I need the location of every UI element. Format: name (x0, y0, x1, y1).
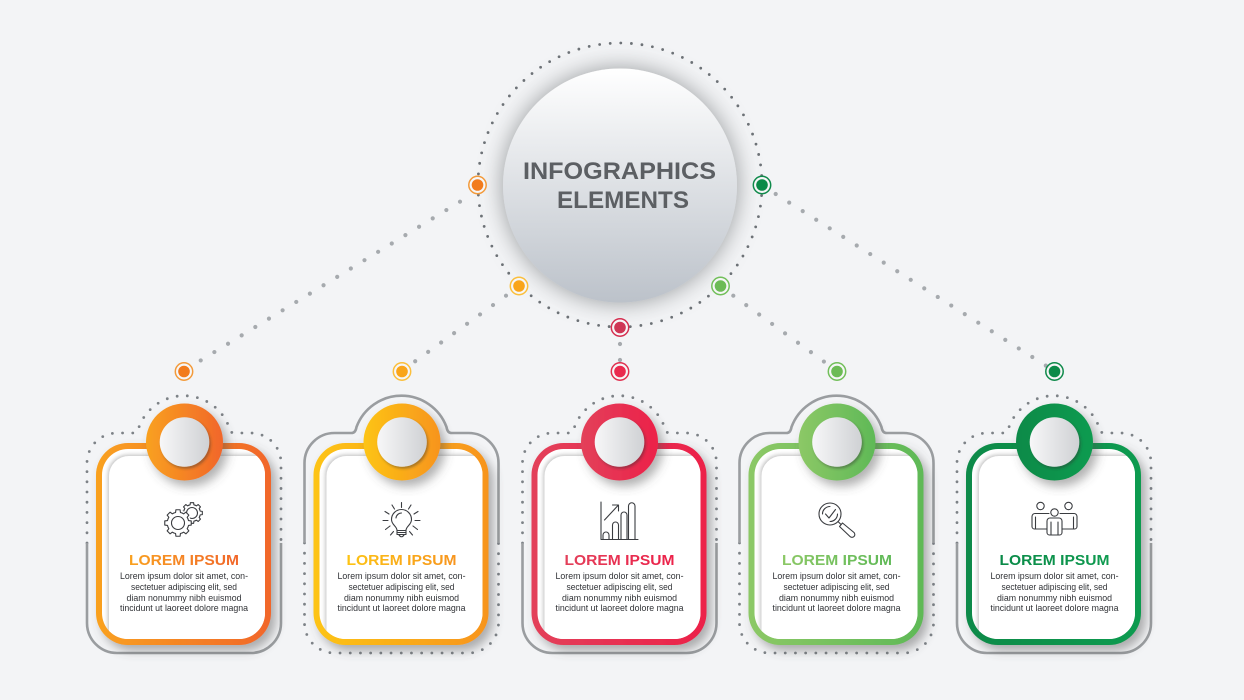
node: yellow upper (510, 277, 528, 295)
connector: red dotted line (618, 344, 622, 361)
node: light green lower (828, 363, 846, 380)
node: light green upper (712, 277, 729, 295)
panel: card 5 dark green (957, 396, 1151, 656)
dotted ring around main circle (478, 43, 762, 327)
body text: tincidunt ut laoreet dolore magna (120, 603, 249, 613)
body text: Lorem ipsum dolor sit amet, con- (338, 571, 466, 581)
node: dark green upper (753, 176, 771, 194)
title: ELEMENTS (557, 187, 689, 214)
heading: LOREM IPSUM (1000, 552, 1110, 569)
body text: sectetuer adipiscing elit, sed (566, 582, 672, 592)
title (523, 158, 716, 214)
title: INFOGRAPHICS (523, 158, 716, 185)
body text (772, 571, 901, 613)
panel: card 4 light green (740, 396, 934, 656)
icon: gears (165, 503, 202, 536)
panel: card 2 yellow (304, 396, 498, 656)
body text: Lorem ipsum dolor sit amet, con- (120, 571, 248, 581)
body text: sectetuer adipiscing elit, sed (1002, 582, 1108, 592)
body text: diam nonummy nibh euismod (344, 593, 459, 603)
body text: tincidunt ut laoreet dolore magna (990, 603, 1119, 613)
node: orange lower (175, 363, 193, 380)
connector: light green dotted line (733, 296, 830, 366)
node: orange upper (469, 176, 486, 194)
body text: diam nonummy nibh euismod (562, 593, 677, 603)
panel: card 1 orange (87, 396, 281, 656)
body text (990, 571, 1119, 613)
body text: sectetuer adipiscing elit, sed (131, 582, 237, 592)
node: yellow lower (393, 363, 411, 380)
body text: diam nonummy nibh euismod (126, 593, 242, 603)
body text (556, 571, 684, 613)
body text: Lorem ipsum dolor sit amet, con- (556, 571, 684, 581)
body text: diam nonummy nibh euismod (779, 593, 894, 603)
icon: magnifier with check (819, 503, 855, 537)
connector: orange dotted line (190, 202, 460, 367)
body text (338, 571, 466, 613)
node: dark green lower (1046, 363, 1063, 380)
heading: LOREM IPSUM (129, 552, 239, 569)
heading: LOREM IPSUM (782, 552, 892, 569)
body text: tincidunt ut laoreet dolore magna (556, 603, 684, 613)
connector: yellow dotted line (410, 296, 506, 365)
panel: card 3 red (522, 396, 716, 656)
main circle (503, 68, 737, 302)
heading: LOREM IPSUM (346, 552, 456, 569)
icon: people group (1032, 502, 1077, 535)
body text (120, 571, 249, 613)
node: red upper (611, 319, 629, 336)
connector: dark green dotted line (776, 194, 1048, 367)
heading: LOREM IPSUM (564, 552, 674, 569)
icon: light bulb (383, 502, 420, 537)
body text: sectetuer adipiscing elit, sed (784, 582, 890, 592)
node: red lower (611, 363, 629, 380)
body text: Lorem ipsum dolor sit amet, con- (772, 571, 900, 581)
icon: bar chart (601, 502, 638, 540)
body text: sectetuer adipiscing elit, sed (348, 582, 454, 592)
body text: Lorem ipsum dolor sit amet, con- (990, 571, 1118, 581)
body text: tincidunt ut laoreet dolore magna (772, 603, 901, 613)
body text: tincidunt ut laoreet dolore magna (338, 603, 466, 613)
body text: diam nonummy nibh euismod (997, 593, 1112, 603)
